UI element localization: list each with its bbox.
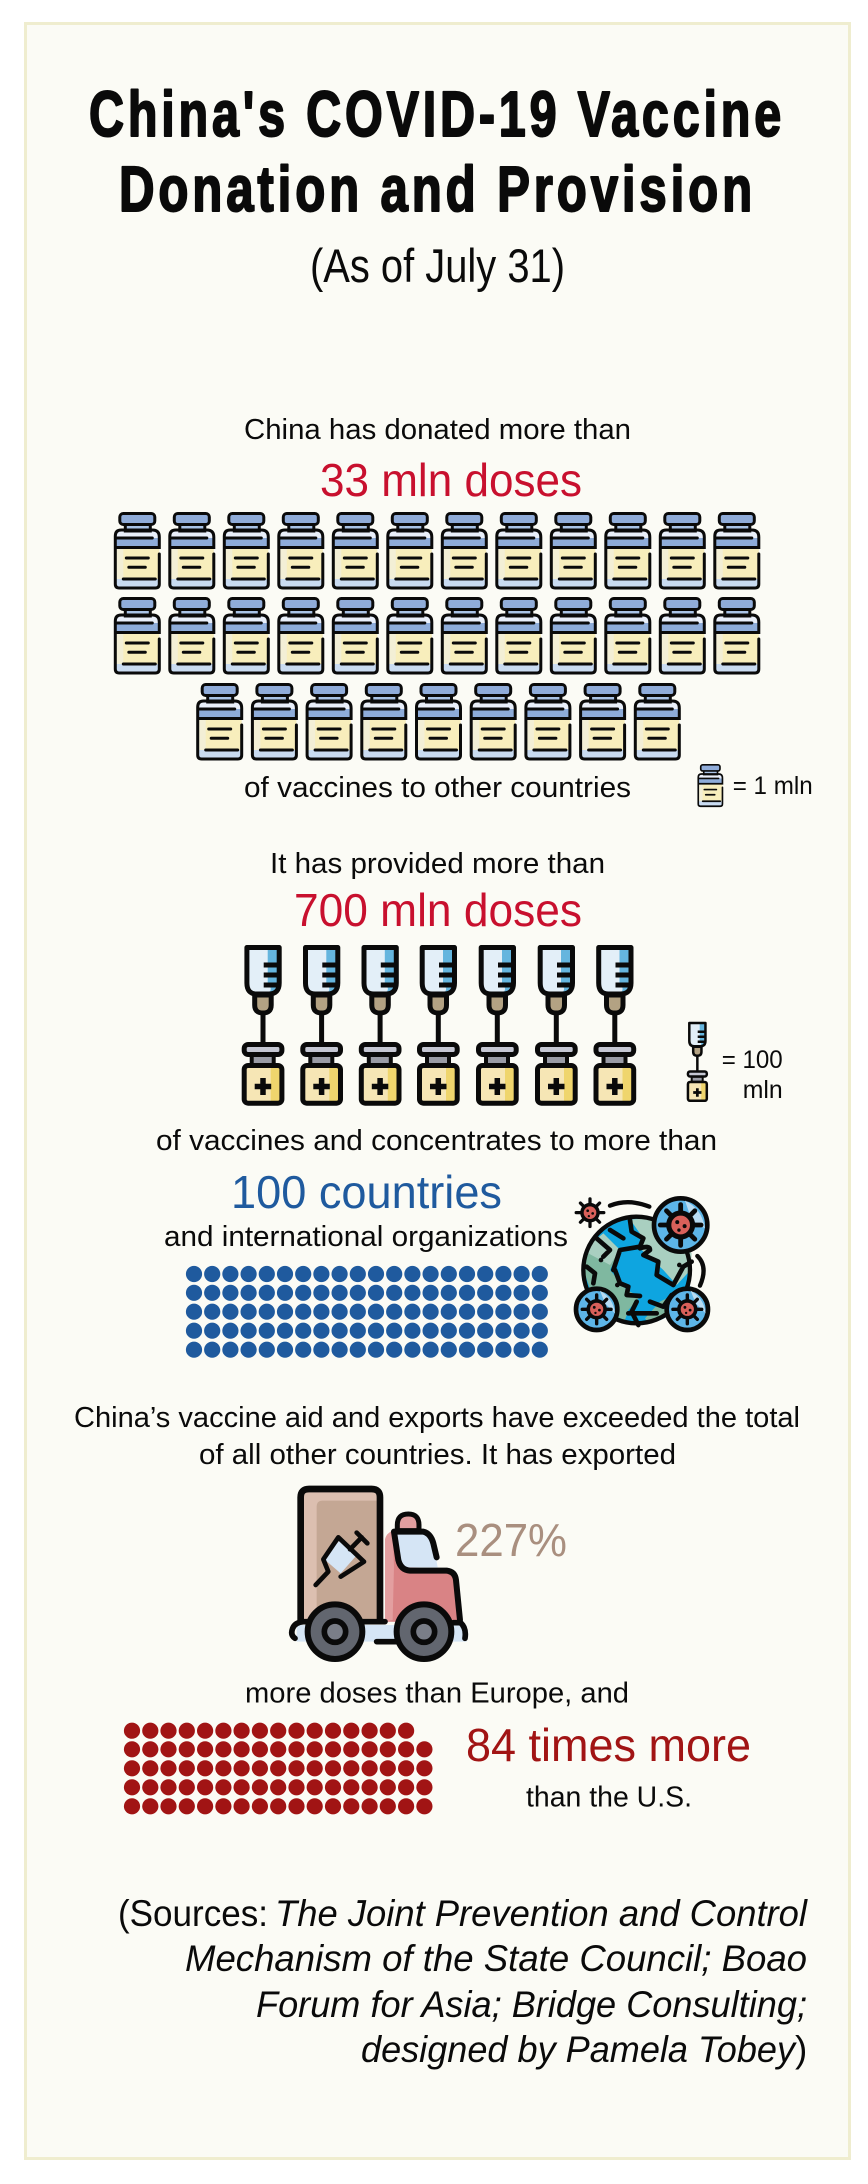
icon: vaccine truck: [292, 1489, 467, 1659]
pictogram: 7 syringes and bottles: [244, 948, 634, 1103]
text: donated intro: China has donated more than: [244, 414, 631, 446]
text: sources: (Sources:: [118, 1893, 268, 1934]
text: sources: [118, 1893, 809, 2070]
legend: syringe equals 100 mln: [688, 1023, 783, 1104]
stat: 700 mln doses: 700 mln doses: [294, 884, 582, 936]
text: sources: Mechanism of the State Council; Boao: [185, 1938, 807, 1979]
dot grid: 100 blue dots: [186, 1266, 548, 1358]
text: provided intro: It has provided more than: [270, 848, 605, 880]
legend: vial equals 1 mln: [698, 765, 813, 806]
text: sources: The Joint Prevention and Control: [275, 1893, 809, 1934]
stat: 84 times more: 84 times more: [466, 1719, 751, 1771]
text: exceeded total: [74, 1402, 800, 1471]
text: sources: Forum for Asia; Bridge Consulting;: [256, 1984, 807, 2025]
text: exceeded total: China’s vaccine aid and exports have exceeded the total: [74, 1402, 800, 1434]
text: exceeded total: of all other countries. It has exported: [199, 1439, 676, 1471]
stat: 100 countries: 100 countries: [231, 1166, 502, 1218]
stat: 227%: 227%: [455, 1514, 567, 1566]
text: sources: designed by Pamela Tobey: [361, 2029, 797, 2070]
stat: 33 mln doses: 33 mln doses: [320, 454, 582, 506]
subtitle: (As of July 31): [310, 239, 565, 292]
icon: globe with viruses: [576, 1198, 708, 1330]
text: sources: ): [795, 2029, 807, 2070]
text: than the U.S.: than the U.S.: [526, 1782, 692, 1814]
pictogram: 33 vaccine vials: [115, 514, 759, 759]
legend: syringe equals 100 mln: = 100: [722, 1046, 783, 1074]
text: to other countries: of vaccines to other countries: [244, 772, 631, 804]
dot grid: 84 red dots: [124, 1723, 433, 1814]
legend: vial equals 1 mln: = 1 mln: [733, 772, 813, 800]
title: [89, 78, 785, 225]
text: concentrates: of vaccines and concentrates to more than: [156, 1125, 717, 1157]
text: more doses than Europe: more doses than Europe, and: [245, 1678, 629, 1710]
text: international organizations: and international organizations: [164, 1221, 568, 1253]
legend: syringe equals 100 mln: mln: [743, 1076, 783, 1104]
